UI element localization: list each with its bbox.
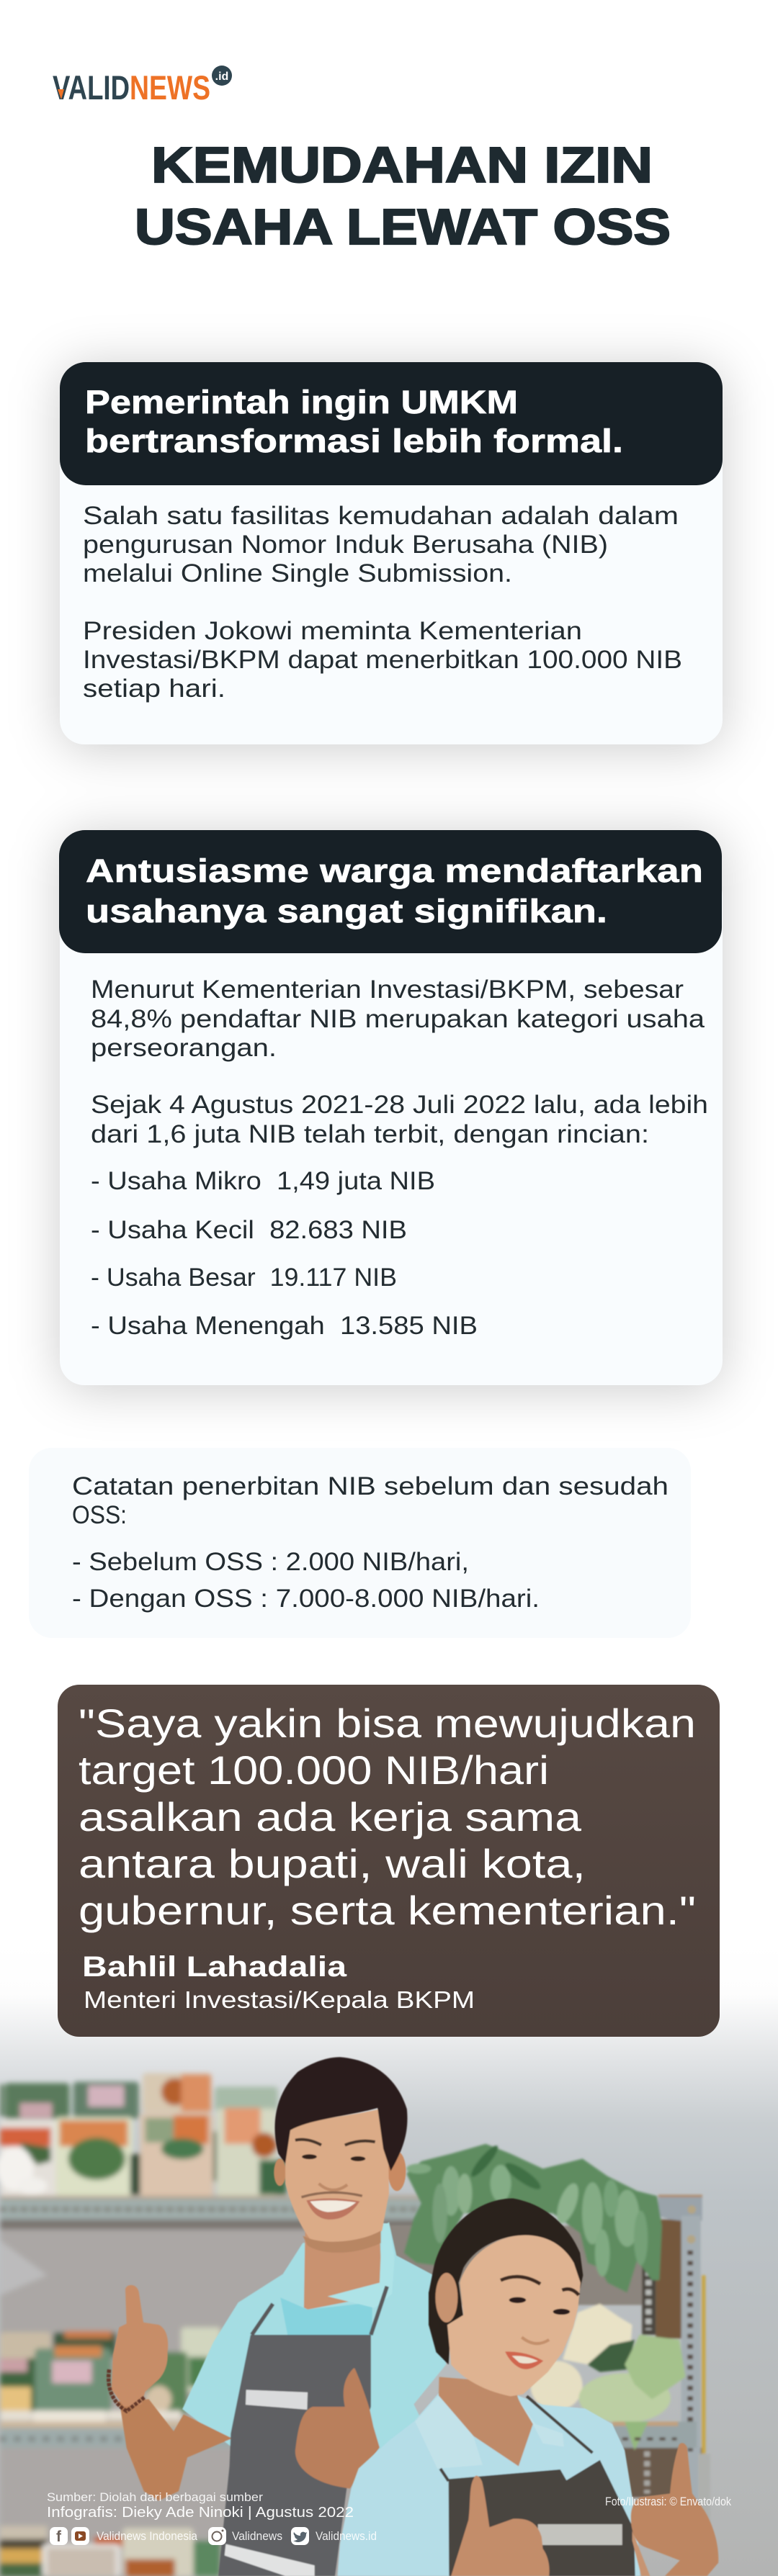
logo: .id (215, 71, 228, 83)
quote attribution: Menteri Investasi/Kepala BKPM (84, 1986, 475, 2013)
man neck (304, 2228, 382, 2310)
icon: facebook (50, 2527, 68, 2545)
panel 1 header: Pemerintah ingin UMKM (85, 384, 518, 420)
panel: NIB issuance before and after OSS: - Dengan OSS : 7.000-8.000 NIB/hari. (72, 1585, 540, 1613)
bottom packs (0, 2526, 221, 2576)
panel 2 body text: dari 1,6 juta NIB telah terbit, dengan rincian: (91, 1120, 649, 1148)
business category list (91, 1167, 478, 1340)
woman face (447, 2235, 581, 2396)
panel 1 body text (83, 502, 682, 703)
man left thumbs-up hand (109, 2285, 168, 2411)
panel: NIB issuance before and after OSS: - Sebelum OSS : 2.000 NIB/hari, (72, 1548, 469, 1576)
business category list: - Usaha Kecil 82.683 NIB (91, 1216, 407, 1244)
text: Validnews Indonesia: Validnews Indonesia (97, 2529, 197, 2543)
business category list: - Usaha Mikro 1,49 juta NIB (91, 1167, 435, 1195)
woman eyebrows and eyes (501, 2276, 578, 2295)
man hair (274, 2057, 407, 2171)
source and credits: Sumber: Diolah dari berbagai sumber (47, 2490, 263, 2504)
upper shelf (0, 2196, 429, 2230)
woman ear (435, 2273, 457, 2323)
woman neck and chest (439, 2377, 533, 2466)
man (109, 2057, 446, 2576)
man collar (280, 2223, 395, 2336)
woman shirt (337, 2392, 640, 2576)
man second thumbs-up hand (295, 2368, 380, 2488)
woman nose (522, 2337, 549, 2343)
quote text: target 100.000 NIB/hari (79, 1747, 549, 1793)
quote text: antara bupati, wali kota, (79, 1841, 586, 1886)
source and credits (47, 2490, 354, 2521)
panel 2 header (59, 830, 722, 953)
logo (53, 66, 232, 107)
panel 2 body text (91, 976, 708, 1148)
man eyebrows and eyes (295, 2140, 375, 2145)
panel 1 header (60, 362, 723, 485)
panel 1 body text: melalui Online Single Submission. (83, 559, 512, 587)
quote text (79, 1701, 696, 1933)
lower packs (0, 2328, 221, 2421)
panel 1 body text: Presiden Jokowi meminta Kementerian (83, 617, 582, 645)
panel 1 body text: setiap hari. (83, 675, 225, 703)
woman head and face (429, 2199, 583, 2396)
panel 1 body text: Salah satu fasilitas kemudahan adalah dalam (83, 502, 679, 530)
icon: instagram (208, 2527, 226, 2545)
panel 1 body text: pengurusan Nomor Induk Berusaha (NIB) (83, 531, 608, 559)
business category list: - Usaha Menengah 13.585 NIB (91, 1312, 478, 1340)
icon: facebook: f (56, 2528, 62, 2545)
title (135, 137, 671, 255)
panel: government wants formal MSMEs (60, 362, 723, 744)
title: KEMUDAHAN IZIN (151, 137, 653, 193)
panel 1 header: bertransformasi lebih formal. (85, 423, 623, 459)
green leafy vegetables (404, 2143, 662, 2292)
card shadows (60, 366, 723, 1390)
business category list: - Usaha Besar 19.117 NIB (91, 1264, 397, 1292)
woman collar (415, 2395, 564, 2469)
icon: youtube (71, 2527, 89, 2545)
quote text: gubernur, serta kementerian." (79, 1888, 696, 1933)
panel 2 header: usahanya sangat signifikan. (86, 893, 607, 929)
panel: NIB issuance before and after OSS: OSS: (72, 1501, 127, 1529)
text: Validnews.id: Validnews.id (316, 2529, 377, 2543)
logo: VALID (53, 68, 130, 107)
cauliflower and cabbage (530, 2304, 686, 2423)
man shirt (182, 2222, 446, 2466)
panel 2 body text: Menurut Kementerian Investasi/BKPM, sebesar (91, 976, 684, 1004)
woman right hand (631, 2443, 718, 2576)
text: Validnews: Validnews (232, 2529, 282, 2543)
upper packs back row (0, 2073, 278, 2120)
panel: public enthusiasm (59, 830, 723, 1385)
quote attribution: Bahlil Lahadalia (82, 1951, 347, 1983)
logo: NEWS (130, 68, 210, 107)
man nose (319, 2184, 347, 2190)
panel 2 header: Antusiasme warga mendaftarkan (86, 852, 703, 889)
right shelving unit (389, 2143, 710, 2536)
quote text: "Saya yakin bisa mewujudkan (79, 1701, 696, 1746)
panel 2 body text: Sejak 4 Agustus 2021-28 Juli 2022 lalu, ada lebih (91, 1091, 708, 1119)
man head and face (274, 2057, 407, 2253)
panel: minister quote (58, 1685, 720, 2037)
panel: NIB issuance before and after OSS (29, 1448, 691, 1638)
panel 2 body text: perseorangan. (91, 1034, 277, 1062)
quote attribution (82, 1951, 475, 2013)
woman (337, 2199, 718, 2576)
photo: shop shelves and produce (0, 2057, 718, 2576)
woman smile (505, 2351, 543, 2369)
panel 1 body text: Investasi/BKPM dapat menerbitkan 100.000 NIB (83, 646, 682, 674)
photo: wall background (0, 1944, 778, 2576)
source and credits: Infografis: Dieky Ade Ninoki | Agustus 2022 (47, 2505, 354, 2521)
upper packs front row (0, 2108, 287, 2197)
woman left hand (451, 2476, 550, 2576)
woman hair back (429, 2199, 583, 2364)
shelf post (658, 2194, 710, 2536)
man mustache and smile (301, 2192, 362, 2197)
icon: twitter (291, 2527, 309, 2545)
social media row (50, 2527, 377, 2545)
back wall under shelves (0, 2230, 372, 2576)
man apron (218, 2287, 387, 2576)
woman apron (440, 2396, 635, 2576)
panel 2 body text: 84,8% pendaftar NIB merupakan kategori usaha (91, 1005, 705, 1033)
lower shelf (0, 2421, 248, 2448)
panel: NIB issuance before and after OSS: Catatan penerbitan NIB sebelum dan sesudah (72, 1472, 669, 1500)
photo credit: Foto/Ilustrasi: © Envato/dok (605, 2495, 731, 2508)
quote text: asalkan ada kerja sama (79, 1794, 582, 1839)
lower shelf on right (612, 2421, 697, 2450)
title: USAHA LEWAT OSS (135, 199, 671, 255)
shelf rear panels (389, 2220, 702, 2498)
man left arm (117, 2399, 231, 2500)
